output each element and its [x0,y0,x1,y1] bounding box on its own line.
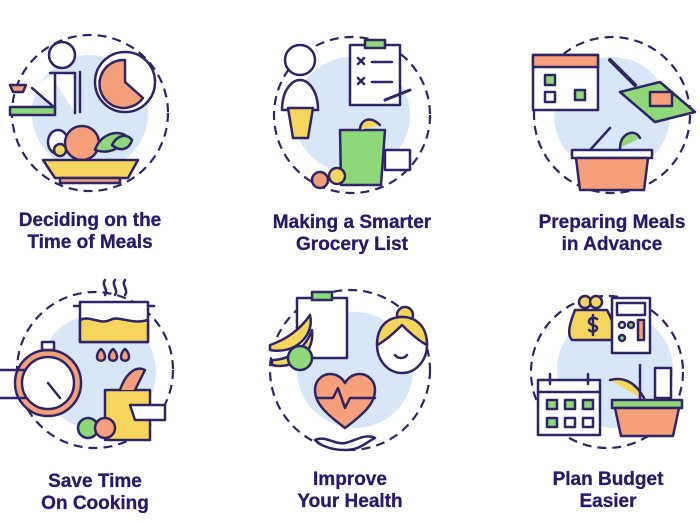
heading: preparing: Preparing Meals [539,212,685,233]
icon: checklist [350,40,410,105]
icon: salad bowl [43,126,138,183]
icon: person [282,45,318,138]
heading: deciding: Deciding on the [19,210,161,231]
icon: grocery bag [312,120,410,188]
icon: clipboard [297,292,347,358]
panel: plan budget [531,296,683,448]
icon: cutting board [610,60,695,122]
icon: bananas and lime [270,315,312,370]
heading: in advance: in Advance [562,234,662,255]
icon: container [572,128,652,190]
heading: plan budget: Plan Budget [553,469,664,490]
icon: woman face [377,307,427,373]
heading: easier: Easier [579,491,637,512]
icon: stopwatch [0,342,81,416]
heading: time of meals: Time of Meals [27,232,153,253]
heading: improve: Improve [313,469,387,490]
icon: calendar [533,55,598,110]
heading: grocery list: Grocery List [296,234,409,255]
icon: clock [95,52,155,112]
icon: heart [315,374,375,450]
panel: preparing meals [533,37,695,193]
icon: grocery bag [78,369,165,440]
icon: basket [610,365,682,436]
heading: save time: Save Time [48,471,142,492]
panel: smarter grocery list [274,37,430,193]
icon: calculator [612,298,650,353]
panel: improve health [270,290,430,450]
icon: steam and pot [74,280,154,361]
icon: calendar [538,374,600,435]
panel: save time [0,280,173,448]
heading: making: Making a Smarter [273,212,432,233]
heading: on cooking: On Cooking [41,493,149,514]
heading: your health: Your Health [297,491,403,512]
panel: deciding time of meals [10,35,168,191]
icon: person at table [10,42,80,115]
icon: coin purse [569,296,615,340]
